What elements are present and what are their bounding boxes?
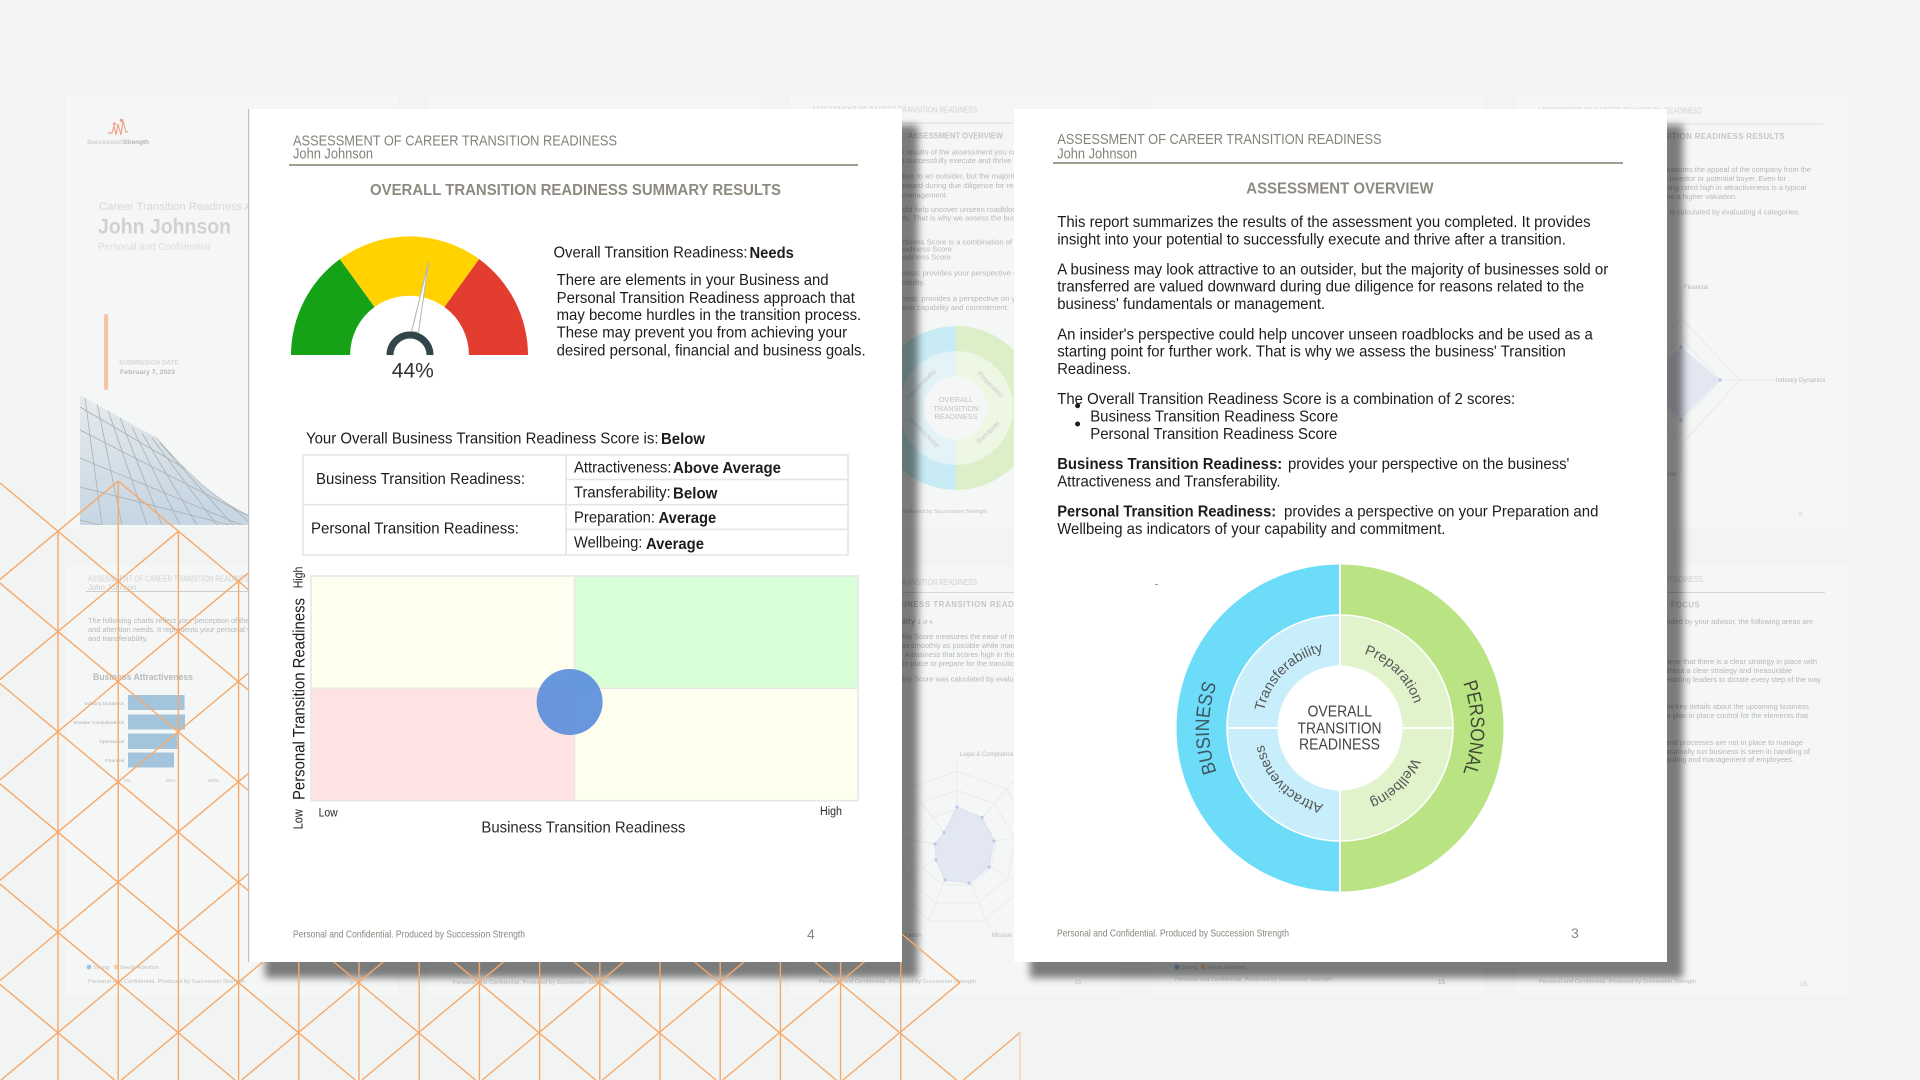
faded page: business attractiveness: The following charts reflect your perception of the strength	[88, 616, 278, 625]
page footer: Personal and Confidential. Produced by Succession Strength	[1057, 928, 1289, 940]
text block: valuation	[1057, 261, 1608, 313]
faded page: business attractiveness: John Johnson	[88, 583, 137, 592]
faded page: assessment overview: Business Transition Readiness: provides your perspective on the business'	[812, 269, 1070, 278]
radar chart	[881, 752, 1033, 939]
cover logotype: Succession	[87, 139, 123, 146]
readiness description: desired personal, financial and business goals.	[557, 342, 866, 360]
faded page footers, middle: 11	[1075, 979, 1082, 986]
faded page: focus areas: Management systems and processes are not in place to manage	[1591, 738, 1803, 747]
page header	[1053, 132, 1623, 164]
text block: personal definition	[1057, 504, 1598, 538]
faded cover page	[80, 118, 248, 525]
page header: John Johnson	[1057, 147, 1137, 163]
text block: business definition: provides your perspective on the business'	[1288, 456, 1569, 473]
text block: intro	[1057, 214, 1591, 248]
faded donut: TRANSITION	[933, 404, 979, 413]
text block: intro: insight into your potential to successfully execute and thrive after a transition.	[1057, 231, 1566, 248]
y axis labels: Personal Transition Readiness	[290, 598, 308, 800]
radar chart	[1590, 285, 1825, 478]
faded page: assessment overview: A business may look attractive to an outsider, but the majority of businesses sold or	[812, 172, 1093, 181]
score table: Above Average	[673, 460, 781, 477]
faded page: assessment overview: Personal Transition Readiness Score	[826, 253, 951, 262]
radar chart: Industry Dynamics	[1776, 378, 1825, 384]
readiness description: These may prevent you from achieving your	[557, 325, 847, 342]
outer ring: personal	[1340, 564, 1504, 892]
x axis labels: Low	[319, 808, 338, 820]
score table: Wellbeing:	[574, 534, 642, 552]
faded page: focus areas: the hiring, onboarding and management of employees.	[1615, 755, 1794, 764]
text block: business definition: Business Transition Readiness:	[1057, 456, 1282, 473]
text block: personal definition: provides a perspective on your Preparation and	[1284, 504, 1598, 521]
center circle	[1278, 666, 1402, 790]
segment label: attractiveness: Attractiveness	[1257, 746, 1324, 813]
faded page: focus areas	[1516, 575, 1825, 764]
icon: succession strength logo	[108, 119, 128, 135]
score table: Business Transition Readiness:	[316, 471, 525, 488]
bar chart	[74, 695, 220, 784]
radar chart: Legal & Compliance	[960, 752, 1014, 758]
faded page: assessment overview: The Overall Transition Readiness Score is a combination of 2 scores:	[812, 238, 1045, 247]
overall score line: Below	[661, 431, 706, 448]
quadrant chart	[290, 567, 858, 837]
x axis labels: High	[820, 806, 842, 818]
text block: valuation: transferred are valued downward during due diligence for reasons related to the	[1057, 279, 1584, 296]
faded page: assessment overview: Attractiveness and Transferability.	[812, 278, 925, 287]
submission date: SUBMISSION DATE	[119, 360, 179, 367]
text block: business definition	[1057, 456, 1569, 491]
faded page: assessment overview: This report summarizes the results of the assessment you completed. It provides	[812, 148, 1083, 156]
radar chart: Mission	[992, 933, 1012, 939]
faded page: attractiveness radar	[1516, 106, 1825, 518]
radar chart: Integration	[893, 933, 921, 939]
text block: score list: The Overall Transition Readiness Score is a combination of 2 scores:	[1057, 391, 1515, 408]
radar chart: Investor Considerations	[1613, 472, 1676, 478]
ring label: business: BUSINESS	[1196, 682, 1216, 775]
bar chart: Investor Considerations	[74, 720, 125, 726]
text block: valuation: A business may look attractive to an outsider, but the majority of businesses sold or	[1057, 261, 1608, 278]
radar chart: Financial	[1684, 285, 1708, 291]
faded page panels	[66, 96, 1849, 996]
faded page: business attractiveness: Personal and Confidential. Produced by Succession Strength	[88, 979, 245, 985]
faded page: assessment overview: ASSESSMENT OF CAREER TRANSITION READINESS	[812, 106, 977, 115]
x axis labels	[319, 806, 842, 837]
faded page: transferability radar: Transferability 1 of 4	[858, 616, 933, 626]
faded page: focus areas: ASSESSMENT OF CAREER TRANSITION READINESS	[1538, 575, 1703, 584]
faded donut: Wellbeing	[975, 419, 1001, 445]
page footer: 4	[807, 926, 815, 942]
page footer: Personal and Confidential. Produced by Succession Strength	[293, 928, 525, 940]
submission date: February 7, 2023	[120, 369, 175, 376]
text block: perspective: starting point for further work. That is why we assess the business' Transition	[1057, 344, 1566, 361]
cover building image	[80, 395, 250, 528]
faded donut	[874, 326, 1038, 490]
legend: Strong	[93, 965, 109, 971]
faded page: focus areas: people, and a professionally run business is seen in handling of	[1602, 747, 1811, 756]
bar chart: Industry Dynamics	[85, 701, 125, 707]
faded page: attractiveness radar: BUSINESS TRANSITION READINESS RESULTS	[1595, 132, 1785, 141]
readiness description: There are elements in your Business and	[557, 272, 829, 289]
faded page: transferability radar: ce. A business that scores high in this category	[893, 650, 1047, 659]
faded page: assessment overview: Personal Transition Readiness: provides a perspective on your Preparation and	[812, 294, 1084, 303]
bar chart: Financial	[105, 758, 124, 764]
cover subtitle: Personal and Confidential	[98, 242, 210, 253]
page header: ASSESSMENT OF CAREER TRANSITION READINESS	[1057, 132, 1382, 148]
faded page: transferability radar: ASSESSMENT OF CAREER TRANSITION READINESS	[812, 578, 977, 587]
faded page: transferability radar: Transferability Score was calculated by evaluating	[866, 675, 1030, 684]
faded page: transferability radar: transfer as smoothly as possible while maintaining	[874, 641, 1038, 650]
middle ring: segments	[1227, 564, 1453, 892]
faded page: assessment overview: Wellbeing as indicators of your capability and commitment.	[812, 303, 1009, 312]
page footer	[1057, 925, 1579, 941]
outer ring: business	[1176, 564, 1340, 892]
faded page: attractiveness radar: 8	[1799, 511, 1803, 518]
cover name: John Johnson	[98, 216, 231, 238]
panel: assessment overview page (page 3)	[1014, 109, 1667, 962]
text block: score list: Business Transition Readiness Score	[1090, 409, 1338, 426]
faded page footers, middle: 15	[1438, 979, 1446, 986]
segment label: transferability: Transferability	[1254, 644, 1322, 709]
score table: Personal Transition Readiness:	[311, 520, 519, 538]
faded cover page: Strength	[123, 139, 149, 146]
score table: Average	[658, 510, 717, 527]
bar chart: 100%	[207, 778, 220, 784]
center label: OVERALL	[1308, 704, 1372, 721]
text block: personal definition: Personal Transition Readiness:	[1057, 504, 1276, 521]
score table: Average	[646, 536, 704, 553]
faded page: attractiveness radar: a business, being rated high in attractiveness is a typical	[1622, 183, 1806, 192]
ring label: personal: PERSONAL	[1463, 680, 1484, 774]
readiness description: may become hurdles in the transition process.	[557, 307, 861, 324]
score table: Below	[673, 486, 718, 502]
faded donut: OVERALL	[939, 395, 973, 404]
page footer	[293, 926, 815, 942]
text block: business definition: Attractiveness and Transferability.	[1057, 474, 1281, 491]
faded page: assessment overview: ASSESSMENT OVERVIEW	[908, 132, 1004, 140]
page header	[289, 133, 858, 166]
faded page: business attractiveness: and attention needs. It represents your personal view of attractiveness	[88, 625, 318, 634]
bar chart: 0%	[124, 778, 132, 784]
text block: intro: This report summarizes the results of the assessment you completed. It provides	[1057, 214, 1591, 231]
faded page footers, middle: Personal and Confidential. Produced by Succession Strength	[1175, 977, 1332, 983]
legend: Needs Attention	[120, 965, 159, 971]
page footer: 3	[1571, 925, 1579, 941]
faded page: assessment overview: transferred are valued downward during due diligence for reasons related to the	[812, 181, 1080, 190]
orange lattice decoration	[0, 481, 1020, 1080]
faded page: business attractiveness: ASSESSMENT OF CAREER TRANSITION READINESS	[88, 575, 253, 584]
faded page: attractiveness radar: Attractiveness measures the appeal of the company from the	[1612, 165, 1811, 174]
gauge hub	[390, 335, 430, 355]
faded page: assessment overview: business' fundamentals or management.	[812, 191, 948, 200]
faded page: focus areas: Business owners believe that there is a clear strategy in place with	[1600, 657, 1817, 666]
faded page: attractiveness radar: ASSESSMENT OF CAREER TRANSITION READINESS	[1537, 106, 1702, 116]
submission date	[119, 360, 179, 376]
faded page: business attractiveness: 7	[350, 981, 353, 987]
faded page footers, middle: Strong	[1181, 965, 1197, 971]
overall readiness rating: Needs	[750, 245, 794, 262]
faded page footers, middle: Personal and Confidential. Produced by Succession Strength	[1539, 979, 1696, 985]
page header: ASSESSMENT OF CAREER TRANSITION READINESS	[293, 133, 617, 149]
text block: valuation: business' fundamentals or management.	[1057, 296, 1325, 313]
gauge value: 44%	[392, 358, 434, 382]
faded donut: Transferability	[904, 367, 938, 402]
faded page: assessment overview: insight into your potential to successfully execute and thrive after a transition.	[812, 156, 1070, 165]
gauge chart	[291, 236, 528, 382]
faded page: business attractiveness	[74, 575, 386, 987]
faded page: transferability radar: BUSINESS TRANSITION READINESS RESULTS	[886, 600, 1084, 609]
legend	[87, 965, 159, 971]
donut diagram	[1176, 564, 1504, 892]
gauge needle	[412, 262, 429, 332]
center label: READINESS	[1299, 736, 1380, 753]
segment label: preparation: Preparation	[1365, 645, 1420, 703]
bar chart: 50%	[166, 778, 176, 784]
faded page footers, middle: Personal and Confidential. Produced by Succession Strength	[453, 980, 610, 986]
faded page: transferability radar: ps in place to prepare for the transition ahead	[893, 659, 1042, 668]
faded page: focus areas: measures, but without a clear strategy and measurable	[1612, 666, 1792, 675]
segment label: wellbeing: Wellbeing	[1370, 760, 1421, 807]
faded page: assessment overview: Business Transition Readiness Score	[826, 244, 952, 254]
text block: personal definition: Wellbeing as indicators of your capability and commitment.	[1057, 521, 1445, 538]
heading: OVERALL TRANSITION READINESS SUMMARY RESULTS	[370, 182, 781, 199]
background: faded report pages	[66, 96, 1849, 996]
faded donut: Attractiveness	[906, 414, 941, 449]
y axis labels: High	[292, 567, 306, 588]
marker: score position	[537, 669, 603, 735]
center label	[1298, 704, 1382, 753]
page shadows	[265, 125, 1683, 978]
panel: summary results page (page 4)	[248, 109, 902, 962]
faded page footers, middle: 16	[1800, 981, 1808, 988]
overall score line: Your Overall Business Transition Readiness Score is:	[306, 430, 658, 447]
faded page footers, middle: Needs Attention	[1207, 965, 1246, 971]
cover title: Career Transition Readiness Assessment	[99, 201, 307, 213]
overall readiness rating: Overall Transition Readiness:	[554, 244, 748, 261]
faded page: assessment overview	[790, 106, 1120, 515]
faded page: attractiveness radar: perspective of an investor or potential buyer. Even for	[1611, 174, 1787, 183]
text block: perspective: An insider's perspective could help uncover unseen roadblocks and be used as a	[1057, 326, 1593, 343]
faded page footers, middle: Personal and Confidential. Produced by Succession Strength	[819, 979, 976, 985]
faded page footers, middle	[453, 964, 1808, 988]
faded donut: Preparation	[976, 370, 1005, 400]
faded page: attractiveness radar: Attractiveness is calculated by evaluating 4 categories.	[1621, 208, 1800, 216]
faded page: focus areas: BUSINESS FOCUS	[1625, 601, 1700, 610]
faded page: focus areas: Based on the results provided by your advisor, the following areas are	[1585, 617, 1813, 626]
faded page: attractiveness radar: indicator to achieve a higher valuation.	[1611, 192, 1737, 201]
faded page: business attractiveness: and transferability.	[88, 634, 148, 643]
x axis labels: Business Transition Readiness	[481, 820, 686, 837]
faded donut: READINESS	[934, 412, 978, 421]
faded page footers, middle: 9	[718, 981, 721, 987]
faded page: transferability radar	[790, 578, 1120, 939]
page header: John Johnson	[293, 147, 373, 163]
score table: Preparation:	[574, 510, 655, 527]
faded page: assessment overview: An insider's perspective could help uncover unseen roadblocks and be used as a	[812, 205, 1085, 214]
score table: Transferability:	[574, 485, 671, 502]
text block: score list: Personal Transition Readiness Score	[1090, 426, 1337, 443]
cover accent bar	[104, 314, 108, 390]
text block: perspective: Readiness.	[1057, 361, 1131, 378]
score table	[303, 455, 848, 555]
text block: score list	[1057, 391, 1515, 443]
faded page: focus areas: goals, rely on existing leaders to dictate every step of the way	[1620, 675, 1821, 684]
center label: TRANSITION	[1298, 720, 1382, 737]
text block: perspective	[1057, 326, 1593, 378]
faded page: transferability radar: Transferability Score measures the ease of moving the	[866, 632, 1045, 641]
readiness description: Personal Transition Readiness approach that	[557, 290, 856, 307]
faded page: focus areas: transition, with no plan in place control for the elements that	[1613, 711, 1808, 720]
faded page: assessment overview: starting point for further work. That is why we assess the business' Transition	[812, 214, 1070, 222]
faded page: business attractiveness: Business Attractiveness	[93, 672, 193, 682]
faded page: focus areas: Employees may not know key details about the upcoming business	[1590, 702, 1809, 711]
bar chart: Operational	[99, 739, 124, 745]
readiness description	[557, 272, 866, 360]
heading: ASSESSMENT OVERVIEW	[1246, 181, 1434, 198]
score table: Attractiveness:	[574, 460, 672, 477]
faded page: assessment overview: Produced by Succession Strength	[900, 509, 987, 515]
y axis labels: Low	[292, 808, 306, 829]
